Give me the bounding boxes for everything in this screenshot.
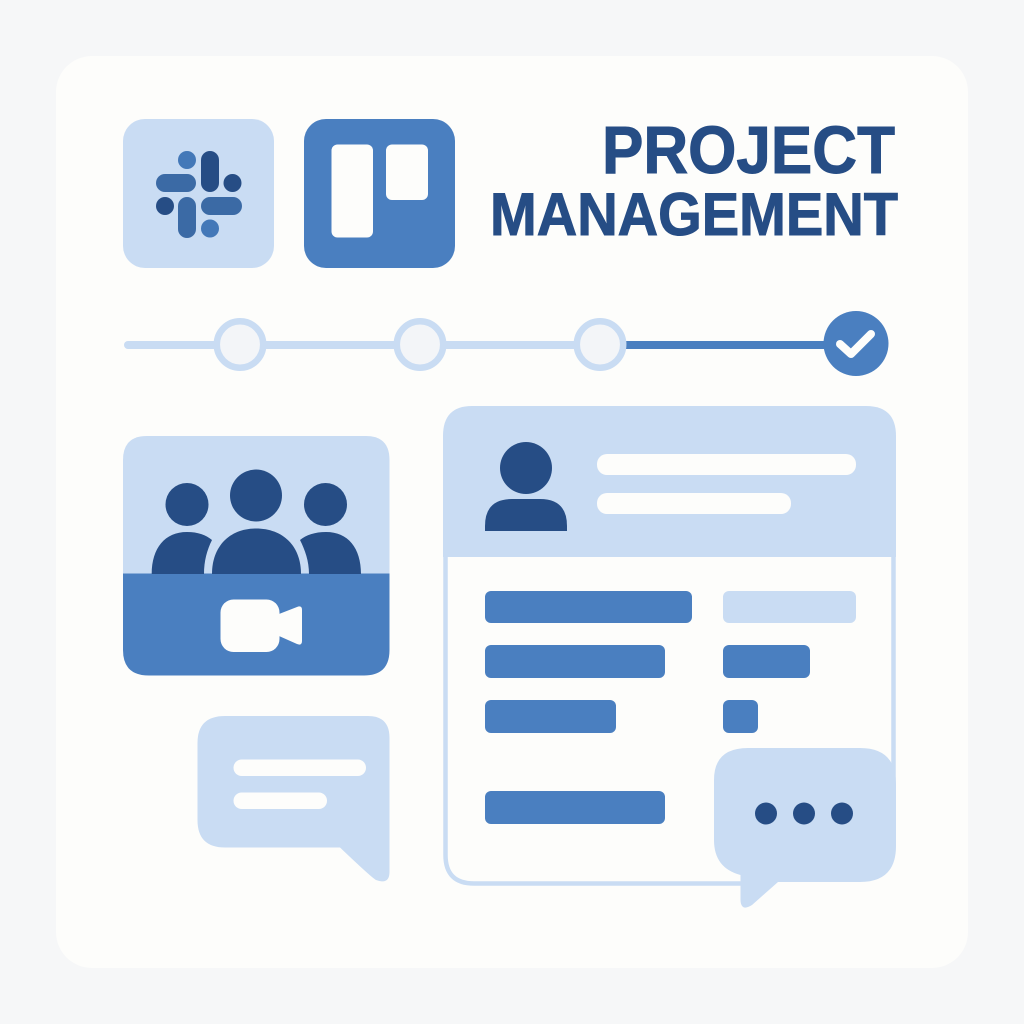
icon: slack tile — [123, 119, 274, 268]
panel: video meeting — [123, 436, 390, 676]
icon: trello tile — [304, 119, 455, 268]
title — [490, 113, 898, 248]
panel: profile card — [443, 406, 896, 884]
icon: user avatar — [485, 442, 567, 531]
icon: completed check — [824, 311, 888, 376]
title: MANAGEMENT — [490, 181, 898, 248]
callout: message speech bubble — [198, 716, 390, 881]
task bars — [485, 591, 856, 824]
title: PROJECT — [602, 113, 895, 188]
progress timeline — [124, 311, 888, 376]
panel: card background — [56, 56, 968, 968]
profile text lines — [597, 454, 856, 514]
callout: typing speech bubble — [714, 748, 896, 908]
icon: team of people — [152, 470, 361, 574]
icon: video camera — [220, 600, 302, 652]
